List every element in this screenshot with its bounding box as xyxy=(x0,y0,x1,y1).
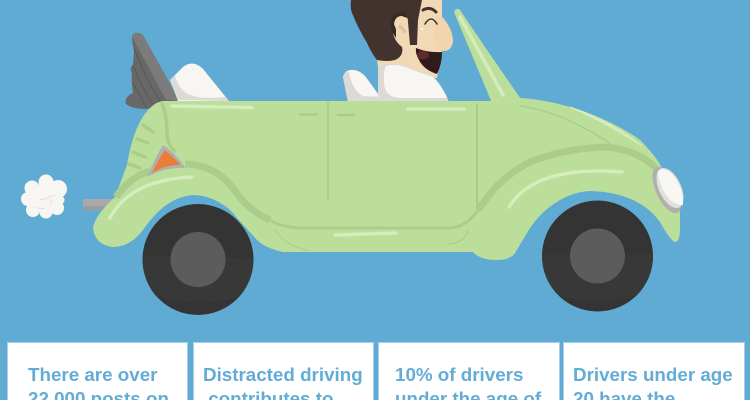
hair xyxy=(351,0,422,61)
neck and face xyxy=(377,0,442,78)
body highlights xyxy=(172,106,464,109)
card text: There are over xyxy=(28,364,157,385)
card text xyxy=(573,364,733,400)
ear xyxy=(394,16,408,37)
card: young drivers fact xyxy=(378,342,560,400)
door lines xyxy=(328,102,477,212)
rear wing crease xyxy=(162,103,176,152)
card: forum posts fact xyxy=(7,342,188,400)
card text xyxy=(395,364,542,400)
hood crease xyxy=(520,106,615,147)
headlight xyxy=(646,163,689,217)
rear seat xyxy=(170,63,229,101)
sill contour line xyxy=(268,207,480,228)
card text xyxy=(203,364,363,400)
exhaust pipe xyxy=(83,199,116,210)
nose xyxy=(434,16,453,51)
exhaust smoke puff xyxy=(21,174,67,218)
sill highlight xyxy=(335,233,396,235)
grille lines xyxy=(129,125,153,168)
shirt xyxy=(378,64,449,102)
card text: Distracted driving xyxy=(203,364,363,385)
card text: 10% of drivers xyxy=(395,364,523,385)
hair shadow around ear xyxy=(391,12,408,38)
hood highlight xyxy=(570,107,642,146)
car body xyxy=(93,98,680,260)
door handles xyxy=(299,113,355,116)
open mouth xyxy=(416,48,442,74)
rear wheel xyxy=(142,204,254,315)
card text xyxy=(28,364,169,400)
rear fender contour xyxy=(116,147,656,220)
sill panel line xyxy=(275,229,468,251)
tail light xyxy=(147,145,185,177)
folded convertible roof xyxy=(126,33,179,109)
windshield xyxy=(454,9,521,103)
front wheel xyxy=(542,200,653,312)
fender highlights xyxy=(110,171,622,218)
card: drivers under 20 fact xyxy=(563,342,745,400)
driver xyxy=(351,0,453,102)
eyebrow xyxy=(423,8,436,12)
card: distracted driving fact xyxy=(193,342,374,400)
front seat xyxy=(343,70,384,102)
card text: Drivers under age xyxy=(573,364,733,385)
closed smiling eye xyxy=(425,19,437,24)
